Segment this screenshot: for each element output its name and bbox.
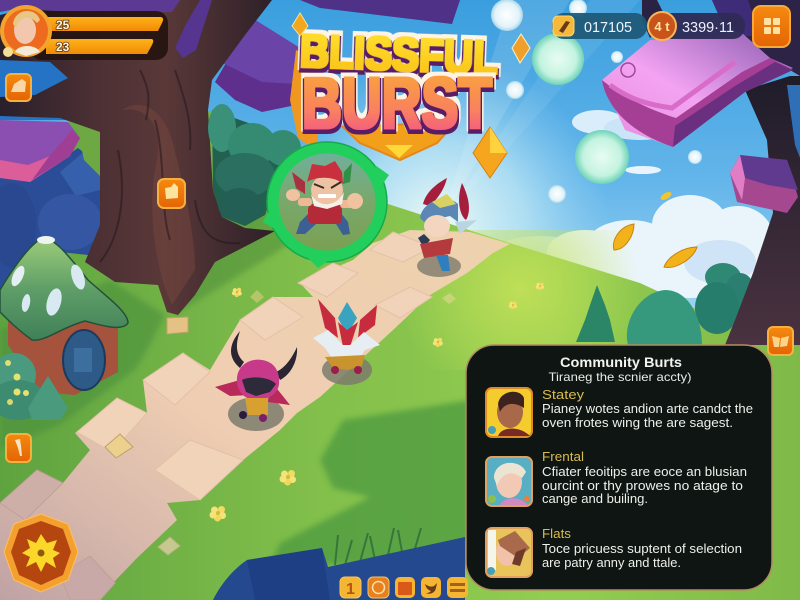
row 2 heading: Frental bbox=[542, 450, 584, 464]
side button: torch bbox=[6, 434, 31, 462]
HUD: gem counter bbox=[648, 12, 745, 40]
toolbar button: bird bbox=[421, 577, 441, 598]
avatar: woman with hat bbox=[486, 528, 532, 577]
panel heading: Community Burts bbox=[560, 354, 682, 370]
row 2 text bbox=[542, 465, 747, 506]
side button: tree bbox=[158, 179, 185, 208]
bushes by house bbox=[0, 353, 68, 420]
teal bushes behind ring bbox=[208, 104, 301, 226]
bubbles bbox=[491, 0, 702, 203]
clouds bbox=[496, 110, 785, 298]
green bushes right bbox=[576, 263, 756, 345]
HUD: gem counter: 4 t bbox=[654, 19, 670, 34]
HUD: player status bbox=[0, 5, 168, 60]
energy bar bbox=[46, 17, 163, 32]
HUD: gem counter: 3399·11 bbox=[682, 20, 734, 36]
row 1 heading: Statey bbox=[542, 388, 585, 402]
row 3 text bbox=[542, 542, 742, 570]
health bar bbox=[46, 39, 153, 54]
row 3 text: are patry anny and ttale. bbox=[542, 556, 681, 570]
HUD: coin counter bbox=[552, 13, 647, 39]
row 1 text: oven frotes wing the are sagest. bbox=[542, 416, 733, 430]
title logo: BLISSFUL bbox=[299, 25, 499, 83]
HUD: coin counter: 017105 bbox=[584, 20, 632, 36]
panel: community bbox=[466, 345, 772, 590]
avatar: woman with white hair bbox=[486, 457, 532, 506]
energy bar: 25 bbox=[56, 18, 70, 32]
row 2 text: cange and builing. bbox=[542, 492, 648, 506]
side button: book bbox=[768, 327, 793, 355]
toolbar button: level: 1 bbox=[346, 581, 355, 598]
purple canopy top left bbox=[0, 0, 212, 182]
menu button bbox=[753, 6, 790, 47]
character: white fox creature bbox=[313, 299, 380, 385]
row 1 text bbox=[542, 402, 753, 430]
title logo bbox=[290, 25, 499, 160]
right tree trunk and dark canopy bbox=[642, 0, 800, 345]
grass gap by trunk bbox=[76, 122, 100, 176]
row 1 text: Pianey wotes andion arte candct the bbox=[542, 402, 753, 416]
title logo: BURST bbox=[302, 64, 492, 144]
shaded grass bbox=[270, 400, 470, 565]
blue rock bottom bbox=[213, 537, 465, 600]
avatar: man bbox=[486, 388, 532, 437]
toolbar button: calendar bbox=[395, 577, 415, 598]
character: selected hero in green ring bbox=[263, 142, 389, 268]
purple platform bbox=[602, 33, 798, 213]
character: pink horned creature bbox=[215, 331, 297, 431]
character: blue helmet warrior bbox=[417, 178, 477, 277]
row 3 heading: Flats bbox=[542, 527, 571, 541]
purple canopy right of trunk bbox=[215, 0, 460, 112]
flowers bbox=[210, 282, 544, 522]
panel subheading: Tiraneg the scnier accty) bbox=[548, 370, 692, 384]
stone path bbox=[0, 230, 510, 600]
row 3 text: Toce pricuess suptent of selection bbox=[542, 542, 742, 556]
mushroom house bbox=[0, 236, 128, 395]
blue rocks left bbox=[0, 55, 102, 290]
brick near roots bbox=[167, 317, 188, 334]
toolbar button: instagram bbox=[368, 577, 389, 598]
player avatar bbox=[0, 5, 52, 57]
burst ability button bbox=[4, 514, 78, 592]
row 2 text: Cfiater feoitips are eoce an blusian bbox=[542, 465, 747, 479]
health bar: 23 bbox=[56, 40, 70, 54]
gems bbox=[292, 13, 697, 267]
bottom toolbar bbox=[340, 577, 468, 598]
left tree trunk bbox=[0, 0, 275, 315]
side button: home bbox=[6, 74, 31, 101]
toolbar button: menu bbox=[447, 577, 468, 598]
row 2 text: ourcint or thy prowes no atage to bbox=[542, 479, 743, 493]
